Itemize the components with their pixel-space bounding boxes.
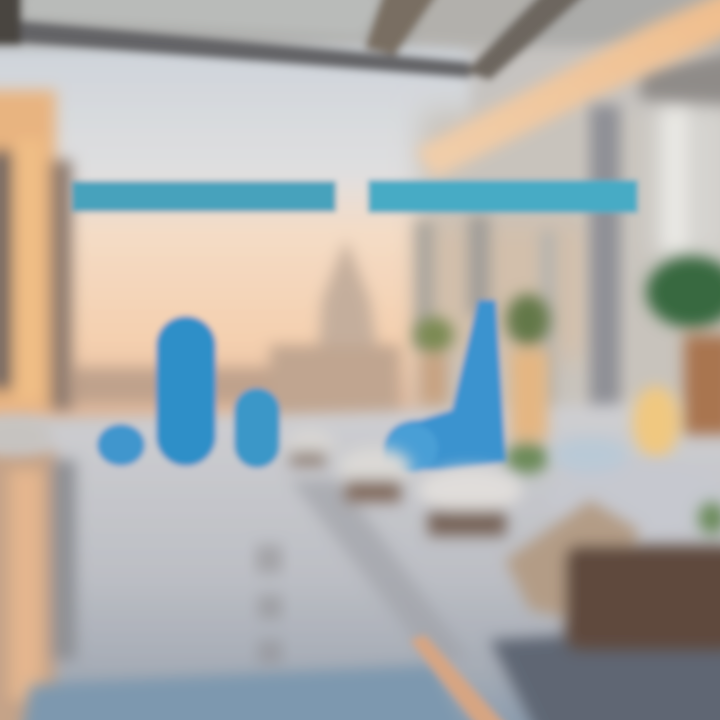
heading bar right: [368, 180, 638, 213]
wicker lounge sofa: [505, 500, 720, 650]
floor: [0, 400, 720, 720]
left edge seat: [0, 418, 53, 454]
heading bar left: [72, 181, 336, 212]
orange roof beam: [415, 0, 720, 178]
right grey column: [590, 105, 620, 450]
terrace tables and lounge seats: [286, 429, 720, 538]
right side building wall: [420, 100, 720, 450]
sky at sunset: [0, 40, 470, 420]
left orange pillar: [0, 90, 72, 410]
floor reflection: small posts: [256, 545, 282, 664]
floor orange edge line: [410, 635, 510, 720]
floor reflection: left pillar: [0, 450, 76, 720]
plants on terrace: [414, 294, 550, 474]
large right plant: [632, 256, 720, 458]
right bar chart: [384, 300, 506, 472]
left bar chart: [97, 316, 280, 468]
distant skyline: [70, 240, 400, 420]
floor blue lower tone: [20, 665, 470, 720]
roof dark beams: [0, 0, 720, 105]
dark right floor: [490, 625, 720, 720]
floor diagonal darker band: [290, 480, 470, 660]
roof panels: [0, 0, 720, 50]
